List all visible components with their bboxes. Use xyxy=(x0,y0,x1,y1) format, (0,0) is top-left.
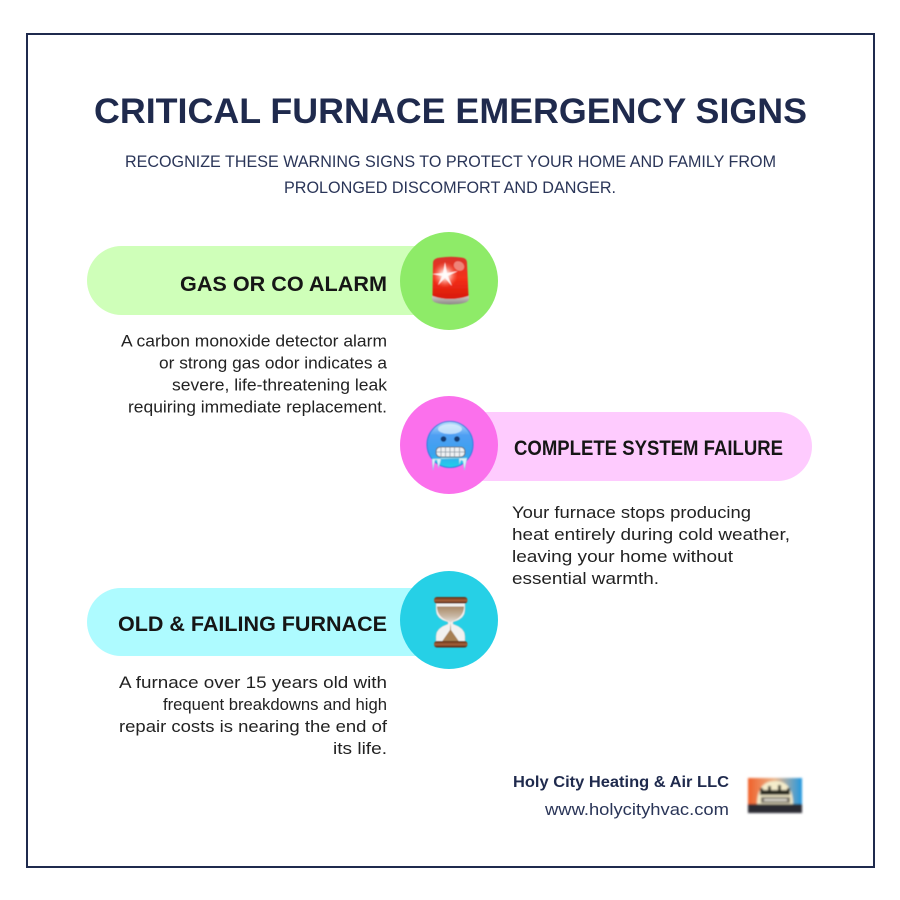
banner: gas or CO alarm xyxy=(87,246,467,315)
footer: company name: Holy City Heating & Air LLC xyxy=(513,774,729,791)
description: old and failing furnace: its life. xyxy=(333,739,387,758)
icon: red siren xyxy=(432,257,469,304)
description: complete system failure: essential warmth. xyxy=(512,569,659,588)
description: complete system failure: heat entirely during cold weather, xyxy=(512,525,790,544)
logo xyxy=(748,778,802,813)
panel: complete system failure xyxy=(400,396,812,588)
heading: old and failing furnace: OLD & FAILING FURNACE xyxy=(118,613,387,636)
description: complete system failure: Your furnace stops producing xyxy=(512,503,751,522)
description: old and failing furnace xyxy=(119,673,387,758)
description: gas or CO alarm: severe, life-threatening leak xyxy=(172,376,388,394)
description: complete system failure: leaving your home without xyxy=(512,547,733,566)
banner: complete system failure xyxy=(432,412,812,481)
heading: complete system failure: COMPLETE SYSTEM FAILURE xyxy=(514,437,783,460)
description: old and failing furnace: frequent breakdowns and high xyxy=(163,695,387,714)
footer: website: www.holycityhvac.com xyxy=(544,801,729,819)
icon circle: green xyxy=(400,232,498,330)
banner: old and failing furnace xyxy=(87,588,467,656)
icon: hourglass xyxy=(434,597,468,648)
subtitle: PROLONGED DISCOMFORT AND DANGER. xyxy=(284,179,616,197)
icon: freezing face xyxy=(427,422,473,470)
description: complete system failure xyxy=(512,503,790,588)
description: gas or CO alarm: A carbon monoxide detector alarm xyxy=(121,332,387,350)
subtitle xyxy=(125,153,776,197)
description: gas or CO alarm xyxy=(121,332,388,416)
description: gas or CO alarm: or strong gas odor indicates a xyxy=(159,354,388,372)
subtitle: RECOGNIZE THESE WARNING SIGNS TO PROTECT YOUR HOME AND FAMILY FROM xyxy=(125,153,776,171)
panel: gas or CO alarm xyxy=(87,232,498,416)
title: CRITICAL FURNACE EMERGENCY SIGNS xyxy=(94,91,807,131)
panel: old and failing furnace xyxy=(87,571,498,758)
icon circle: pink xyxy=(400,396,498,494)
icon circle: cyan xyxy=(400,571,498,669)
description: old and failing furnace: repair costs is nearing the end of xyxy=(119,717,387,736)
heading: gas or CO alarm: GAS OR CO ALARM xyxy=(180,273,387,296)
description: gas or CO alarm: requiring immediate replacement. xyxy=(128,398,387,416)
description: old and failing furnace: A furnace over 15 years old with xyxy=(119,673,387,692)
